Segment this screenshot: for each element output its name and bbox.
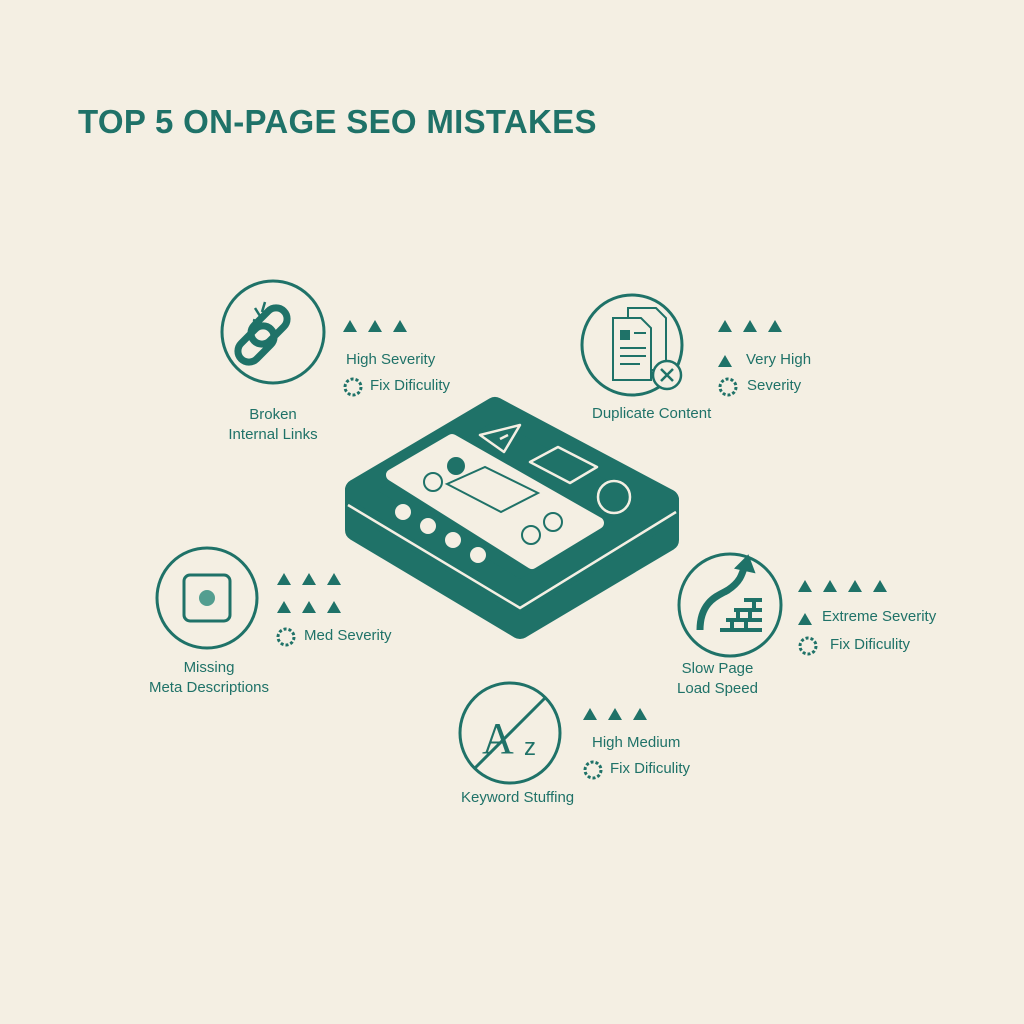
icon: duplicate content <box>582 295 682 395</box>
gear icons <box>278 379 816 778</box>
icon: broken link <box>222 281 324 383</box>
text: Slow Page <box>682 660 753 677</box>
text: Duplicate Content <box>592 405 711 422</box>
labels: missing meta: Med Severity <box>304 627 392 644</box>
text: Broken <box>249 406 297 423</box>
icon: keyword stuffing: z <box>524 734 536 761</box>
device <box>348 408 676 628</box>
text: Missing <box>184 659 234 676</box>
icon: missing meta <box>157 548 257 648</box>
icon: keyword stuffing <box>460 683 560 783</box>
text: Fix Dificulity <box>370 377 450 394</box>
text: Severity <box>747 377 801 394</box>
icon: slow page <box>679 554 781 656</box>
severity triangles <box>277 320 887 720</box>
labels: slow page: Extreme Severity <box>822 608 936 625</box>
text: Meta Descriptions <box>149 679 269 696</box>
text: Keyword Stuffing <box>461 789 574 806</box>
icon: keyword stuffing: A <box>482 714 514 763</box>
text: Fix Dificulity <box>610 760 690 777</box>
text: Fix Dificulity <box>830 636 910 653</box>
labels: keyword: High Medium <box>592 734 680 751</box>
text: Load Speed <box>677 680 758 697</box>
labels: broken links: High Severity <box>346 351 435 368</box>
text: Internal Links <box>228 426 318 443</box>
title: TOP 5 ON-PAGE SEO MISTAKES <box>78 103 597 140</box>
labels: duplicate: Very High <box>746 351 811 368</box>
